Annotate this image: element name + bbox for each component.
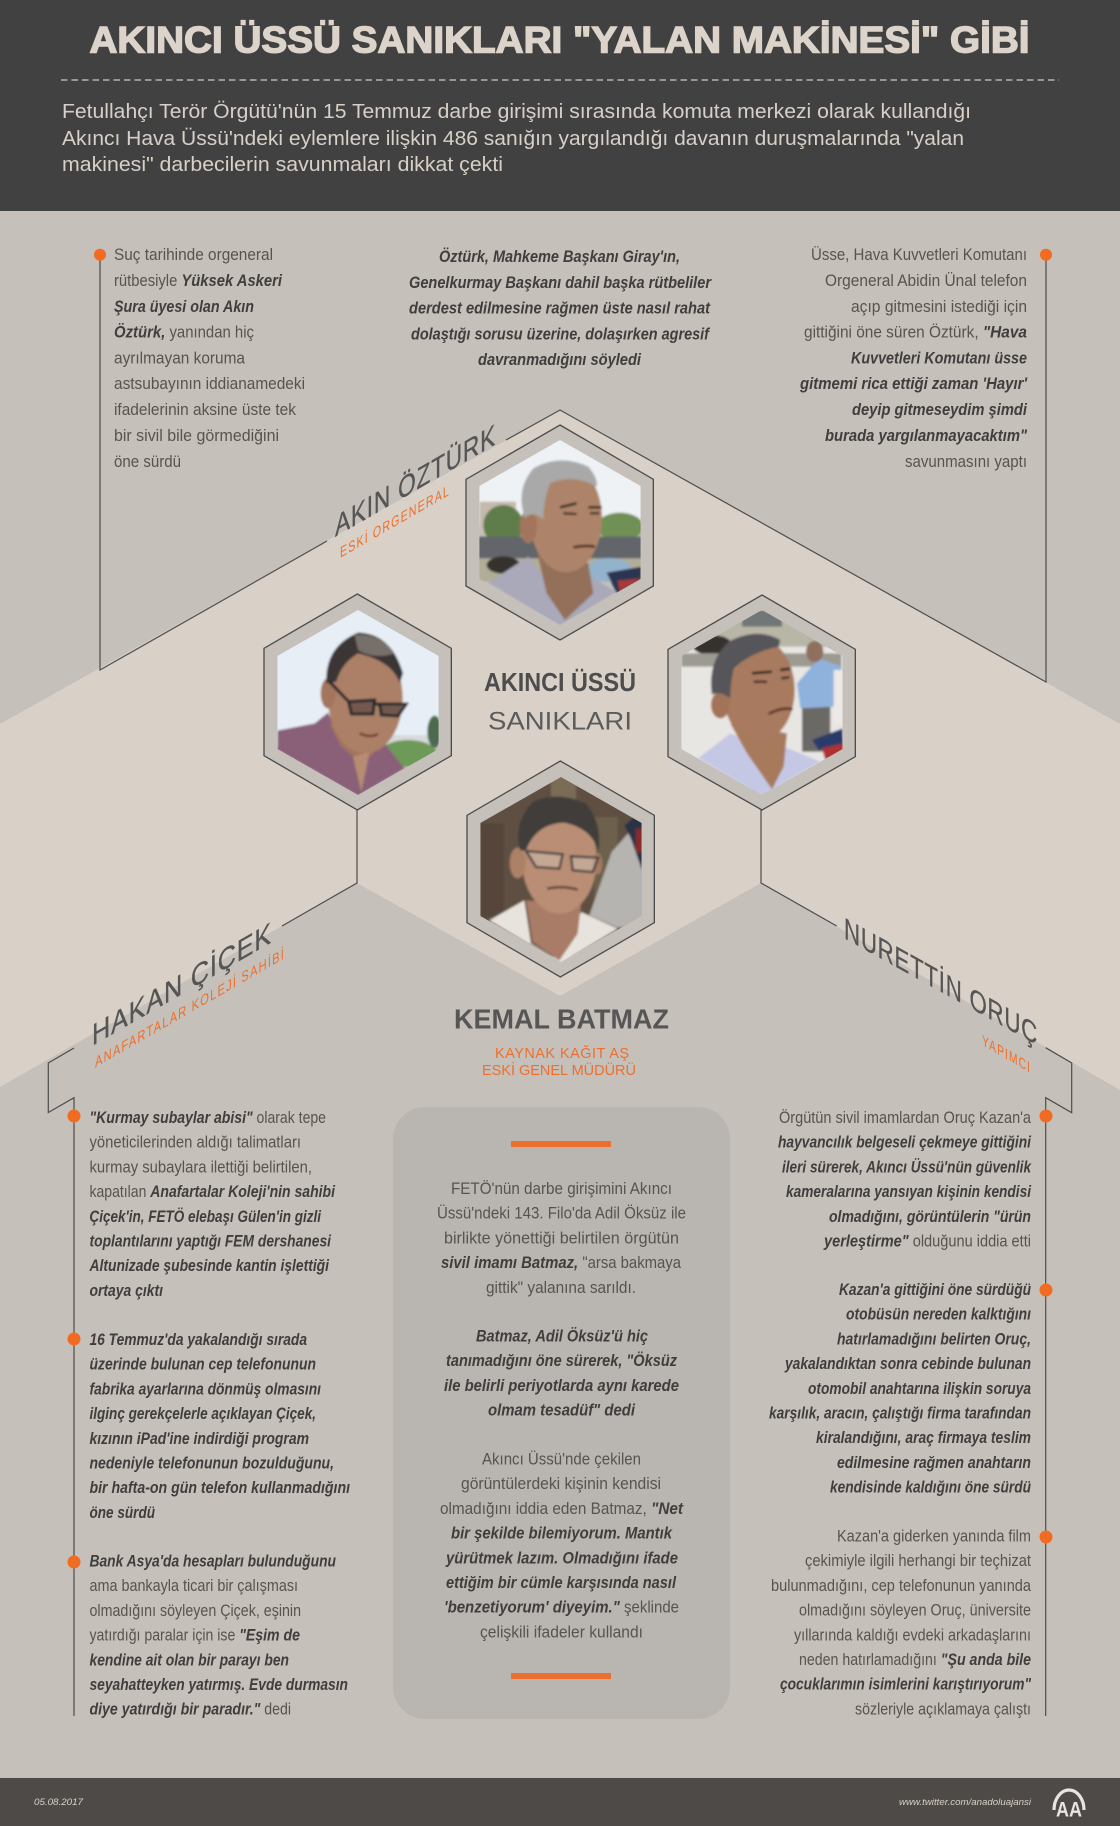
text block: Öztürk right: Üsse, Hava Kuvvetleri Komutanı bbox=[811, 245, 1027, 264]
central heading bbox=[484, 667, 636, 736]
portrait: Akın Öztürk bbox=[460, 420, 660, 640]
text block: Çiçek: öne sürdü bbox=[90, 1503, 155, 1522]
icon: AA logo bbox=[1054, 1790, 1084, 1822]
text block: Oruç: bulunmadığını, cep telefonunun yanında bbox=[771, 1576, 1031, 1595]
text block: Çiçek: kendine ait olan bir parayı ben bbox=[90, 1650, 289, 1669]
panel text: olmam tesadüf" dedi bbox=[488, 1401, 636, 1420]
panel text: ile belirli periyotlarda aynı karede bbox=[444, 1376, 679, 1395]
name: Hakan Çiçek: HAKAN ÇİÇEK bbox=[92, 915, 272, 1052]
text block: Çiçek bbox=[89, 1108, 350, 1718]
title: AKINCI ÜSSÜ SANIKLARI "YALAN MAKİNESİ" GİBİ bbox=[90, 20, 1030, 61]
text block: Öztürk left: astsubayının iddianamedeki bbox=[114, 374, 305, 393]
text block: Öztürk left: Şura üyesi olan Akın bbox=[114, 297, 254, 316]
text block: Çiçek: Bank Asya'da hesapları bulunduğunu bbox=[90, 1552, 336, 1570]
text block: Çiçek: toplantılarını yaptığı FEM dershanesi bbox=[90, 1232, 332, 1250]
text block: Öztürk right: gitmemi rica ettiği zaman 'Hayır' bbox=[799, 374, 1028, 393]
text block: Öztürk right: Orgeneral Abidin Ünal telefon bbox=[825, 271, 1027, 290]
light central band bbox=[0, 410, 1120, 1090]
panel text: çelişkili ifadeler kullandı bbox=[480, 1622, 643, 1641]
orange bar top bbox=[511, 1141, 611, 1147]
text block: Oruç: karşılık, aracın, çalıştığı firma tarafından bbox=[769, 1404, 1031, 1422]
text block: Öztürk left: rütbesiyle Yüksek Askeri bbox=[114, 271, 283, 290]
panel text: yürütmek lazım. Olmadığını ifade bbox=[445, 1548, 678, 1567]
portrait: Hakan Çiçek bbox=[258, 590, 458, 810]
text block: Oruç: yakalandıktan sonra cebinde bulunan bbox=[784, 1354, 1031, 1373]
text block: Çiçek: ilginç gerekçelerle açıklayan Çiçek, bbox=[90, 1404, 316, 1423]
date: 05.08.2017 bbox=[34, 1797, 84, 1808]
intro text: Akıncı Hava Üssü'ndeki eylemlere ilişkin 486 sanığın yargılandığı davanın duruşmalarında "yalan bbox=[62, 127, 964, 150]
role: Anafartalar Koleji sahibi: ANAFARTALAR KOLEJİ SAHİBİ bbox=[95, 944, 285, 1071]
name: Nurettin Oruç bbox=[844, 911, 1038, 1077]
intro text: Fetullahçı Terör Örgütü'nün 15 Temmuz darbe girişimi sırasında komuta merkezi olarak kullandığı bbox=[62, 100, 971, 123]
portrait: Nurettin Oruç bbox=[662, 590, 862, 810]
text block: Oruç: kiralandığını, araç firmaya teslim bbox=[816, 1428, 1031, 1447]
text block: Oruç: Kazan'a giderken yanında film bbox=[837, 1526, 1031, 1546]
connector lines bbox=[48, 255, 1072, 1716]
text block: Öztürk left: öne sürdü bbox=[114, 452, 181, 471]
text block: Oruç: otomobil anahtarına ilişkin soruya bbox=[808, 1379, 1031, 1398]
text block: Öztürk left: Suç tarihinde orgeneral bbox=[114, 245, 273, 264]
name: Akın Öztürk bbox=[335, 417, 496, 562]
central heading: AKINCI ÜSSÜ bbox=[484, 667, 636, 697]
text block: Oruç: hatırlamadığını belirten Oruç, bbox=[837, 1329, 1031, 1348]
text block: Öztürk centre: Öztürk, Mahkeme Başkanı Giray'ın, bbox=[439, 247, 680, 266]
text block: Oruç: yerleştirme" olduğunu iddia etti bbox=[823, 1232, 1031, 1250]
panel text: Akıncı Üssü'nde çekilen bbox=[482, 1450, 641, 1468]
text block: Öztürk centre: dolaştığı sorusu üzerine, dolaşırken agresif bbox=[411, 324, 711, 343]
text block: Öztürk right: burada yargılanmayacaktım" bbox=[825, 426, 1028, 445]
text block: Çiçek: bir hafta-on gün telefon kullanmadığını bbox=[90, 1478, 350, 1497]
panel text: görüntülerdeki kişinin kendisi bbox=[461, 1474, 661, 1493]
text block: Öztürk left: Öztürk, yanından hiç bbox=[114, 323, 254, 342]
intro text bbox=[62, 100, 971, 176]
text block: Öztürk centre bbox=[409, 247, 712, 369]
panel text bbox=[437, 1179, 686, 1641]
panel text: FETÖ'nün darbe girişimini Akıncı bbox=[451, 1179, 672, 1198]
social link: www.twitter.com/anadoluajansi bbox=[899, 1797, 1032, 1808]
text block: Oruç: sözleriyle açıklamaya çalıştı bbox=[855, 1699, 1031, 1718]
text block: Öztürk right: gittiğini öne süren Öztürk, "Hava bbox=[804, 323, 1027, 342]
text block: Öztürk centre: derdest edilmesine rağmen üste nasıl rahat bbox=[409, 299, 711, 318]
name: Nurettin Oruç: NURETTİN ORUÇ bbox=[844, 911, 1038, 1052]
text block: Oruç: hayvancılık belgeseli çekmeye gittiğini bbox=[778, 1133, 1032, 1152]
text block: Çiçek: yöneticilerinden aldığı talimatları bbox=[90, 1133, 301, 1152]
text block: Çiçek: kurmay subaylara ilettiği belirtilen, bbox=[90, 1157, 312, 1176]
header bbox=[0, 0, 1120, 211]
text block: Çiçek: Çiçek'in, FETÖ elebaşı Gülen'in gizli bbox=[90, 1207, 322, 1226]
text block: Çiçek: yatırdığı paralar için ise "Eşim de bbox=[90, 1626, 300, 1645]
text block: Oruç: edilmesine rağmen anahtarın bbox=[837, 1453, 1031, 1472]
name: Kemal Batmaz: KEMAL BATMAZ bbox=[454, 1004, 669, 1034]
role: Yapımcı: YAPIMCI bbox=[982, 1032, 1031, 1077]
text block: Oruç: olmadığını söyleyen Oruç, üniversite bbox=[799, 1601, 1031, 1620]
text block: Öztürk centre: Genelkurmay Başkanı dahil başka rütbeliler bbox=[409, 273, 712, 292]
text block: Çiçek: ortaya çıktı bbox=[90, 1281, 163, 1300]
panel text: Üssü'ndeki 143. Filo'da Adil Öksüz ile bbox=[437, 1204, 686, 1223]
name: Akın Öztürk: AKIN ÖZTÜRK bbox=[335, 417, 496, 543]
icon: AA logo: AA bbox=[1056, 1798, 1082, 1822]
text block: Oruç: yıllarında kaldığı evdeki arkadaşlarını bbox=[794, 1625, 1031, 1644]
text block: Oruç: kameralarına yansıyan kişinin kendisi bbox=[786, 1182, 1032, 1201]
text block: Öztürk left: ifadelerinin aksine üste tek bbox=[114, 400, 296, 419]
panel text: bir şekilde bilemiyorum. Mantık bbox=[451, 1524, 673, 1543]
text block: Çiçek: kapatılan Anafartalar Koleji'nin sahibi bbox=[90, 1182, 336, 1201]
panel text: birlikte yönettiği belirtilen örgütün bbox=[444, 1228, 679, 1247]
text block: Çiçek: Altunizade şubesinde kantin işlettiği bbox=[89, 1256, 330, 1275]
text block: Oruç bbox=[769, 1108, 1032, 1718]
text block: Çiçek: nedeniyle telefonunun bozulduğunu, bbox=[90, 1454, 334, 1472]
text block: Çiçek: "Kurmay subaylar abisi" olarak tepe bbox=[90, 1108, 326, 1127]
central heading: SANIKLARI bbox=[488, 708, 632, 736]
name: Kemal Batmaz bbox=[454, 1004, 669, 1079]
text block: Oruç: çocuklarımın isimlerini karıştırıyorum" bbox=[780, 1675, 1032, 1694]
text block: Çiçek: kızının iPad'ine indirdiği program bbox=[90, 1429, 309, 1448]
text block: Oruç: Örgütün sivil imamlardan Oruç Kazan'a bbox=[779, 1108, 1031, 1127]
text block: Oruç: olmadığını, görüntülerin "ürün bbox=[829, 1207, 1031, 1226]
panel text: 'benzetiyorum' diyeyim." şeklinde bbox=[444, 1598, 679, 1617]
panel text: tanımadığını öne sürerek, "Öksüz bbox=[446, 1351, 677, 1370]
text block: Oruç: Kazan'a gittiğini öne sürdüğü bbox=[839, 1280, 1031, 1299]
text block: Öztürk right: Kuvvetleri Komutanı üsse bbox=[851, 348, 1027, 368]
panel: Batmaz bbox=[393, 1107, 730, 1719]
role: Eski Orgeneral: ESKİ ORGENERAL bbox=[340, 481, 450, 562]
text block: Çiçek: ama bankayla ticari bir çalışması bbox=[90, 1576, 298, 1595]
role: Kaynak Kağıt: KAYNAK KAĞIT AŞ bbox=[495, 1045, 629, 1062]
panel text: Batmaz, Adil Öksüz'ü hiç bbox=[476, 1326, 648, 1346]
orange bar bottom bbox=[511, 1673, 611, 1679]
panel text: olmadığını iddia eden Batmaz, "Net bbox=[440, 1499, 684, 1518]
text block: Çiçek: olmadığını söyleyen Çiçek, eşinin bbox=[90, 1601, 301, 1620]
text block: Çiçek: fabrika ayarlarına dönmüş olmasını bbox=[90, 1379, 321, 1398]
text block: Öztürk left: ayrılmayan koruma bbox=[114, 348, 245, 368]
text block: Oruç: kendisinde kaldığını öne sürdü bbox=[830, 1478, 1031, 1497]
text block: Oruç: ileri sürerek, Akıncı Üssü'nün güvenlik bbox=[782, 1157, 1032, 1176]
intro text: makinesi" darbecilerin savunmaları dikkat çekti bbox=[62, 153, 503, 176]
panel text: sivil imamı Batmaz, "arsa bakmaya bbox=[441, 1253, 681, 1272]
timeline dots bbox=[68, 249, 1052, 1569]
text block: Öztürk left bbox=[114, 245, 305, 471]
text block: Öztürk left: bir sivil bile görmediğini bbox=[114, 426, 279, 445]
text block: Çiçek: diye yatırdığı bir paradır." dedi bbox=[90, 1700, 291, 1718]
text block: Öztürk centre: davranmadığını söyledi bbox=[478, 350, 642, 369]
footer bbox=[0, 1778, 1120, 1826]
portrait: Kemal Batmaz bbox=[461, 757, 661, 977]
panel text: ettiğim bir cümle karşısında nasıl bbox=[446, 1573, 677, 1592]
text block: Öztürk right: deyip gitmeseydim şimdi bbox=[852, 400, 1028, 419]
panel text: gittik" yalanına sarıldı. bbox=[486, 1278, 636, 1297]
text block: Öztürk right bbox=[799, 245, 1028, 471]
text block: Çiçek: 16 Temmuz'da yakalandığı sırada bbox=[90, 1330, 307, 1349]
text block: Öztürk right: açıp gitmesini istediği için bbox=[851, 297, 1027, 316]
text block: Oruç: otobüsün nereden kalktığını bbox=[846, 1305, 1031, 1324]
text block: Öztürk right: savunmasını yaptı bbox=[905, 452, 1027, 471]
name: Kemal Batmaz: ESKİ GENEL MÜDÜRÜ bbox=[482, 1061, 636, 1079]
text block: Çiçek: seyahatteyken yatırmış. Evde durmasın bbox=[90, 1675, 348, 1694]
text block: Oruç: neden hatırlamadığını "Şu anda bile bbox=[799, 1650, 1031, 1669]
text block: Çiçek: üzerinde bulunan cep telefonunun bbox=[90, 1355, 316, 1374]
text block: Oruç: çekimiyle ilgili herhangi bir teçhizat bbox=[805, 1551, 1031, 1570]
